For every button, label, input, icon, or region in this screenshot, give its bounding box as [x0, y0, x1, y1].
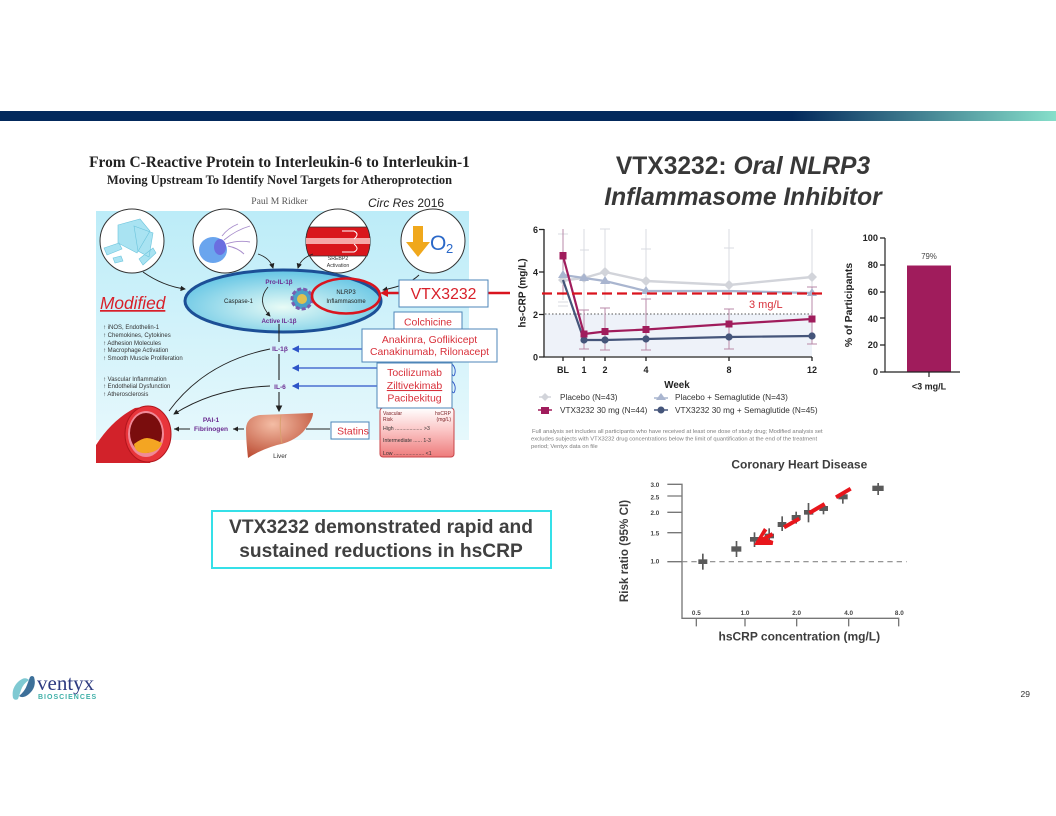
liver illustration [246, 413, 313, 460]
hsCRP risk table: (mg/L) [437, 417, 451, 423]
hsCRP risk table: Low ..................... <1 [383, 451, 432, 457]
axis tick labels: 8 [726, 365, 732, 375]
paper title block: From C-Reactive Protein to Interleukin-6 to Interleukin-1 [89, 154, 470, 171]
chart: coronary heart disease risk: 4.0 [844, 610, 854, 617]
icon: low oxygen [401, 209, 465, 273]
page number: 29 [1021, 689, 1030, 699]
chart: coronary heart disease risk: 2.5 [651, 495, 660, 502]
chart: percent of participants bar: % of Participants [844, 263, 855, 347]
chart: coronary heart disease risk: 3.0 [651, 482, 660, 489]
chart legend: VTX3232 30 mg + Semaglutide (N=45) [675, 406, 818, 415]
series: VTX3232 plus semaglutide [563, 280, 816, 344]
logo: Ventyx Biosciences: BIOSCIENCES [38, 694, 97, 701]
red circle on NLRP3 [312, 278, 380, 314]
drug box: IL-6 inhibitors: Pacibekitug [387, 392, 442, 404]
series: placebo plus semaglutide [558, 270, 817, 296]
icon: SREBP2 activation vessel: SREBP2 [328, 256, 348, 262]
inflammasome cell ellipse: NLRP3 [336, 290, 356, 296]
icon: low oxygen: O [430, 232, 446, 255]
chart footnote: period; Ventyx data on file [531, 444, 598, 450]
hsCRP risk table: hsCRP [435, 411, 452, 417]
axis tick labels [533, 225, 817, 375]
chart footnote: Full analysis set includes all participants who have received at least one dose of study drug; Modified analysis set [532, 429, 823, 435]
drug box: IL-1 inhibitors: Canakinumab, Rilonacept [370, 347, 489, 358]
chart: percent of participants bar: 60 [868, 287, 878, 297]
chart: coronary heart disease risk: 1.0 [651, 559, 660, 566]
drug box: colchicine: Colchicine [404, 318, 452, 328]
axis tick labels: 0 [533, 352, 538, 362]
axis tick labels: 4 [533, 268, 538, 278]
axis tick labels: 2 [533, 310, 538, 320]
panel: inflammatory pathway diagram [96, 209, 469, 463]
arrows into inflammasome [143, 254, 419, 290]
chart: percent of participants bar [844, 233, 960, 392]
chart axes [539, 229, 812, 361]
chart: percent of participants bar: 80 [868, 260, 878, 270]
error bars [558, 229, 812, 330]
chart: coronary heart disease risk: 1.5 [651, 530, 660, 537]
drug box: colchicine [394, 312, 462, 331]
chart: percent of participants bar: 79% [921, 252, 937, 261]
paper title block: Paul M Ridker [251, 196, 309, 207]
pathway spine: IL-6 [274, 384, 286, 391]
hsCRP risk table: Vascular [383, 411, 402, 417]
effects list: bottom: ↑ Endothelial Dysfunction [103, 384, 170, 390]
slide title [604, 153, 883, 211]
modified label: Modified [100, 293, 167, 313]
VTX3232 callout with arrow [380, 280, 510, 307]
drug box: IL-1 inhibitors [362, 329, 497, 362]
x axis title: Week [664, 380, 690, 391]
chart legend: Placebo + Semaglutide (N=43) [675, 393, 788, 402]
axis tick labels: BL [557, 365, 569, 375]
chart: coronary heart disease risk: Coronary Heart Disease [731, 457, 868, 471]
icon: macrophage cell [193, 209, 257, 273]
axis tick labels: 2 [602, 365, 608, 375]
effects list: top: ↑ Macrophage Activation [103, 348, 168, 354]
effects list: top [103, 325, 183, 362]
callout: key message: VTX3232 demonstrated rapid and [229, 517, 533, 538]
effects list: bottom: ↑ Vascular Inflammation [103, 377, 167, 383]
effects list: top: ↑ Adhesion Molecules [103, 341, 161, 347]
icon: low oxygen: 2 [446, 241, 453, 256]
effects list: top: ↑ Smooth Muscle Proliferation [103, 356, 183, 362]
red dashed trend arrow [754, 489, 851, 545]
chart: percent of participants bar: 20 [868, 340, 878, 350]
axis tick labels: 4 [643, 365, 649, 375]
chart: coronary heart disease risk: hsCRP concentration (mg/L) [719, 630, 880, 644]
chart: percent of participants bar: 0 [873, 367, 878, 377]
chart footnote [531, 429, 823, 450]
axis tick labels: 6 [533, 225, 538, 235]
inflammasome cell ellipse: Inflammasome [326, 299, 366, 305]
inflammasome cell ellipse: Caspase-1 [224, 299, 254, 305]
pathway spine [169, 324, 288, 414]
artery illustration [96, 406, 171, 463]
hsCRP risk table: Intermediate ...... 1-3 [383, 438, 431, 444]
PAI-1 and fibrinogen label: Fibrinogen [194, 426, 228, 433]
chart: percent of participants bar: 100 [863, 233, 878, 243]
chart: coronary heart disease risk: 8.0 [895, 610, 904, 617]
chart: coronary heart disease risk: 2.0 [651, 510, 660, 517]
drug box: IL-1 inhibitors: Anakinra, Goflikicept [382, 335, 477, 346]
VTX3232 callout with arrow: VTX3232 [411, 286, 476, 303]
chart footnote: excludes subjects with VTX3232 drug concentrations below the limit of quantification at the end of the treatment [531, 436, 818, 442]
slide title: Inflammasome Inhibitor [604, 184, 883, 211]
blue inhibition arrows [293, 349, 455, 393]
series: VTX3232 30 mg [560, 252, 816, 338]
inflammasome cell ellipse [185, 270, 381, 332]
icon: cholesterol crystals [100, 209, 164, 273]
chart legend [538, 393, 818, 415]
drug box: IL-6 inhibitors: Ziltivekimab [387, 380, 442, 392]
chart: percent of participants bar: 40 [868, 314, 878, 324]
drug box: statins [331, 422, 369, 439]
inflammasome cell ellipse: Active IL-1β [261, 318, 297, 325]
drug box: IL-6 inhibitors: Tocilizumab [387, 367, 442, 379]
hsCRP risk table: High ................... >3 [383, 426, 430, 432]
pathway spine: IL-1β [272, 346, 288, 353]
effects list: top: ↑ Chemokines, Cytokines [103, 333, 171, 339]
hsCRP risk table: Risk [383, 417, 393, 423]
logo: Ventyx Biosciences: ventyx [37, 671, 95, 695]
paper title block: Moving Upstream To Identify Novel Targets for Atheroprotection [107, 173, 452, 187]
inflammasome cell ellipse: Pro-IL-1β [265, 279, 293, 286]
3 mg/L threshold line: 3 mg/L [749, 299, 783, 311]
chart legend: Placebo (N=43) [560, 393, 618, 402]
axis tick labels: 1 [581, 365, 587, 375]
chart: coronary heart disease risk: 0.5 [692, 610, 701, 617]
paper title block [89, 154, 470, 207]
series: placebo [558, 267, 817, 290]
callout: key message: sustained reductions in hsCRP [239, 541, 523, 562]
slide title: VTX3232: Oral NLRP3 [616, 153, 870, 180]
effects list: bottom: ↑ Atherosclerosis [103, 392, 148, 398]
chart: percent of participants bar: <3 mg/L [912, 382, 947, 392]
liver illustration: Liver [273, 453, 288, 460]
chart legend: VTX3232 30 mg (N=44) [560, 406, 648, 415]
effects list: top: ↑ iNOS, Endothelin-1 [103, 325, 160, 331]
logo: Ventyx Biosciences [13, 671, 97, 701]
data markers [698, 483, 884, 570]
PAI-1 and fibrinogen label: PAI-1 [203, 417, 220, 424]
chart: coronary heart disease risk: 2.0 [792, 610, 802, 617]
top banner bar [0, 111, 1056, 121]
icon: SREBP2 activation vessel [306, 209, 370, 273]
journal citation: Circ Res 2016 [368, 196, 444, 210]
chart: coronary heart disease risk [618, 457, 907, 644]
callout: key message [212, 511, 551, 568]
icon: SREBP2 activation vessel: Activation [327, 263, 349, 269]
y axis title: hs-CRP (mg/L) [518, 258, 528, 328]
effects list: bottom [103, 377, 170, 398]
hsCRP risk table [380, 408, 454, 457]
chart: hs-CRP line chart [518, 225, 823, 450]
chart: coronary heart disease risk: 1.0 [741, 610, 750, 617]
drug box: IL-6 inhibitors [377, 363, 452, 408]
axis tick labels: 12 [807, 365, 817, 375]
drug box: statins: Statins [337, 426, 369, 438]
chart: coronary heart disease risk: Risk ratio (95% CI) [618, 500, 631, 602]
PAI-1 and fibrinogen label [174, 417, 330, 433]
